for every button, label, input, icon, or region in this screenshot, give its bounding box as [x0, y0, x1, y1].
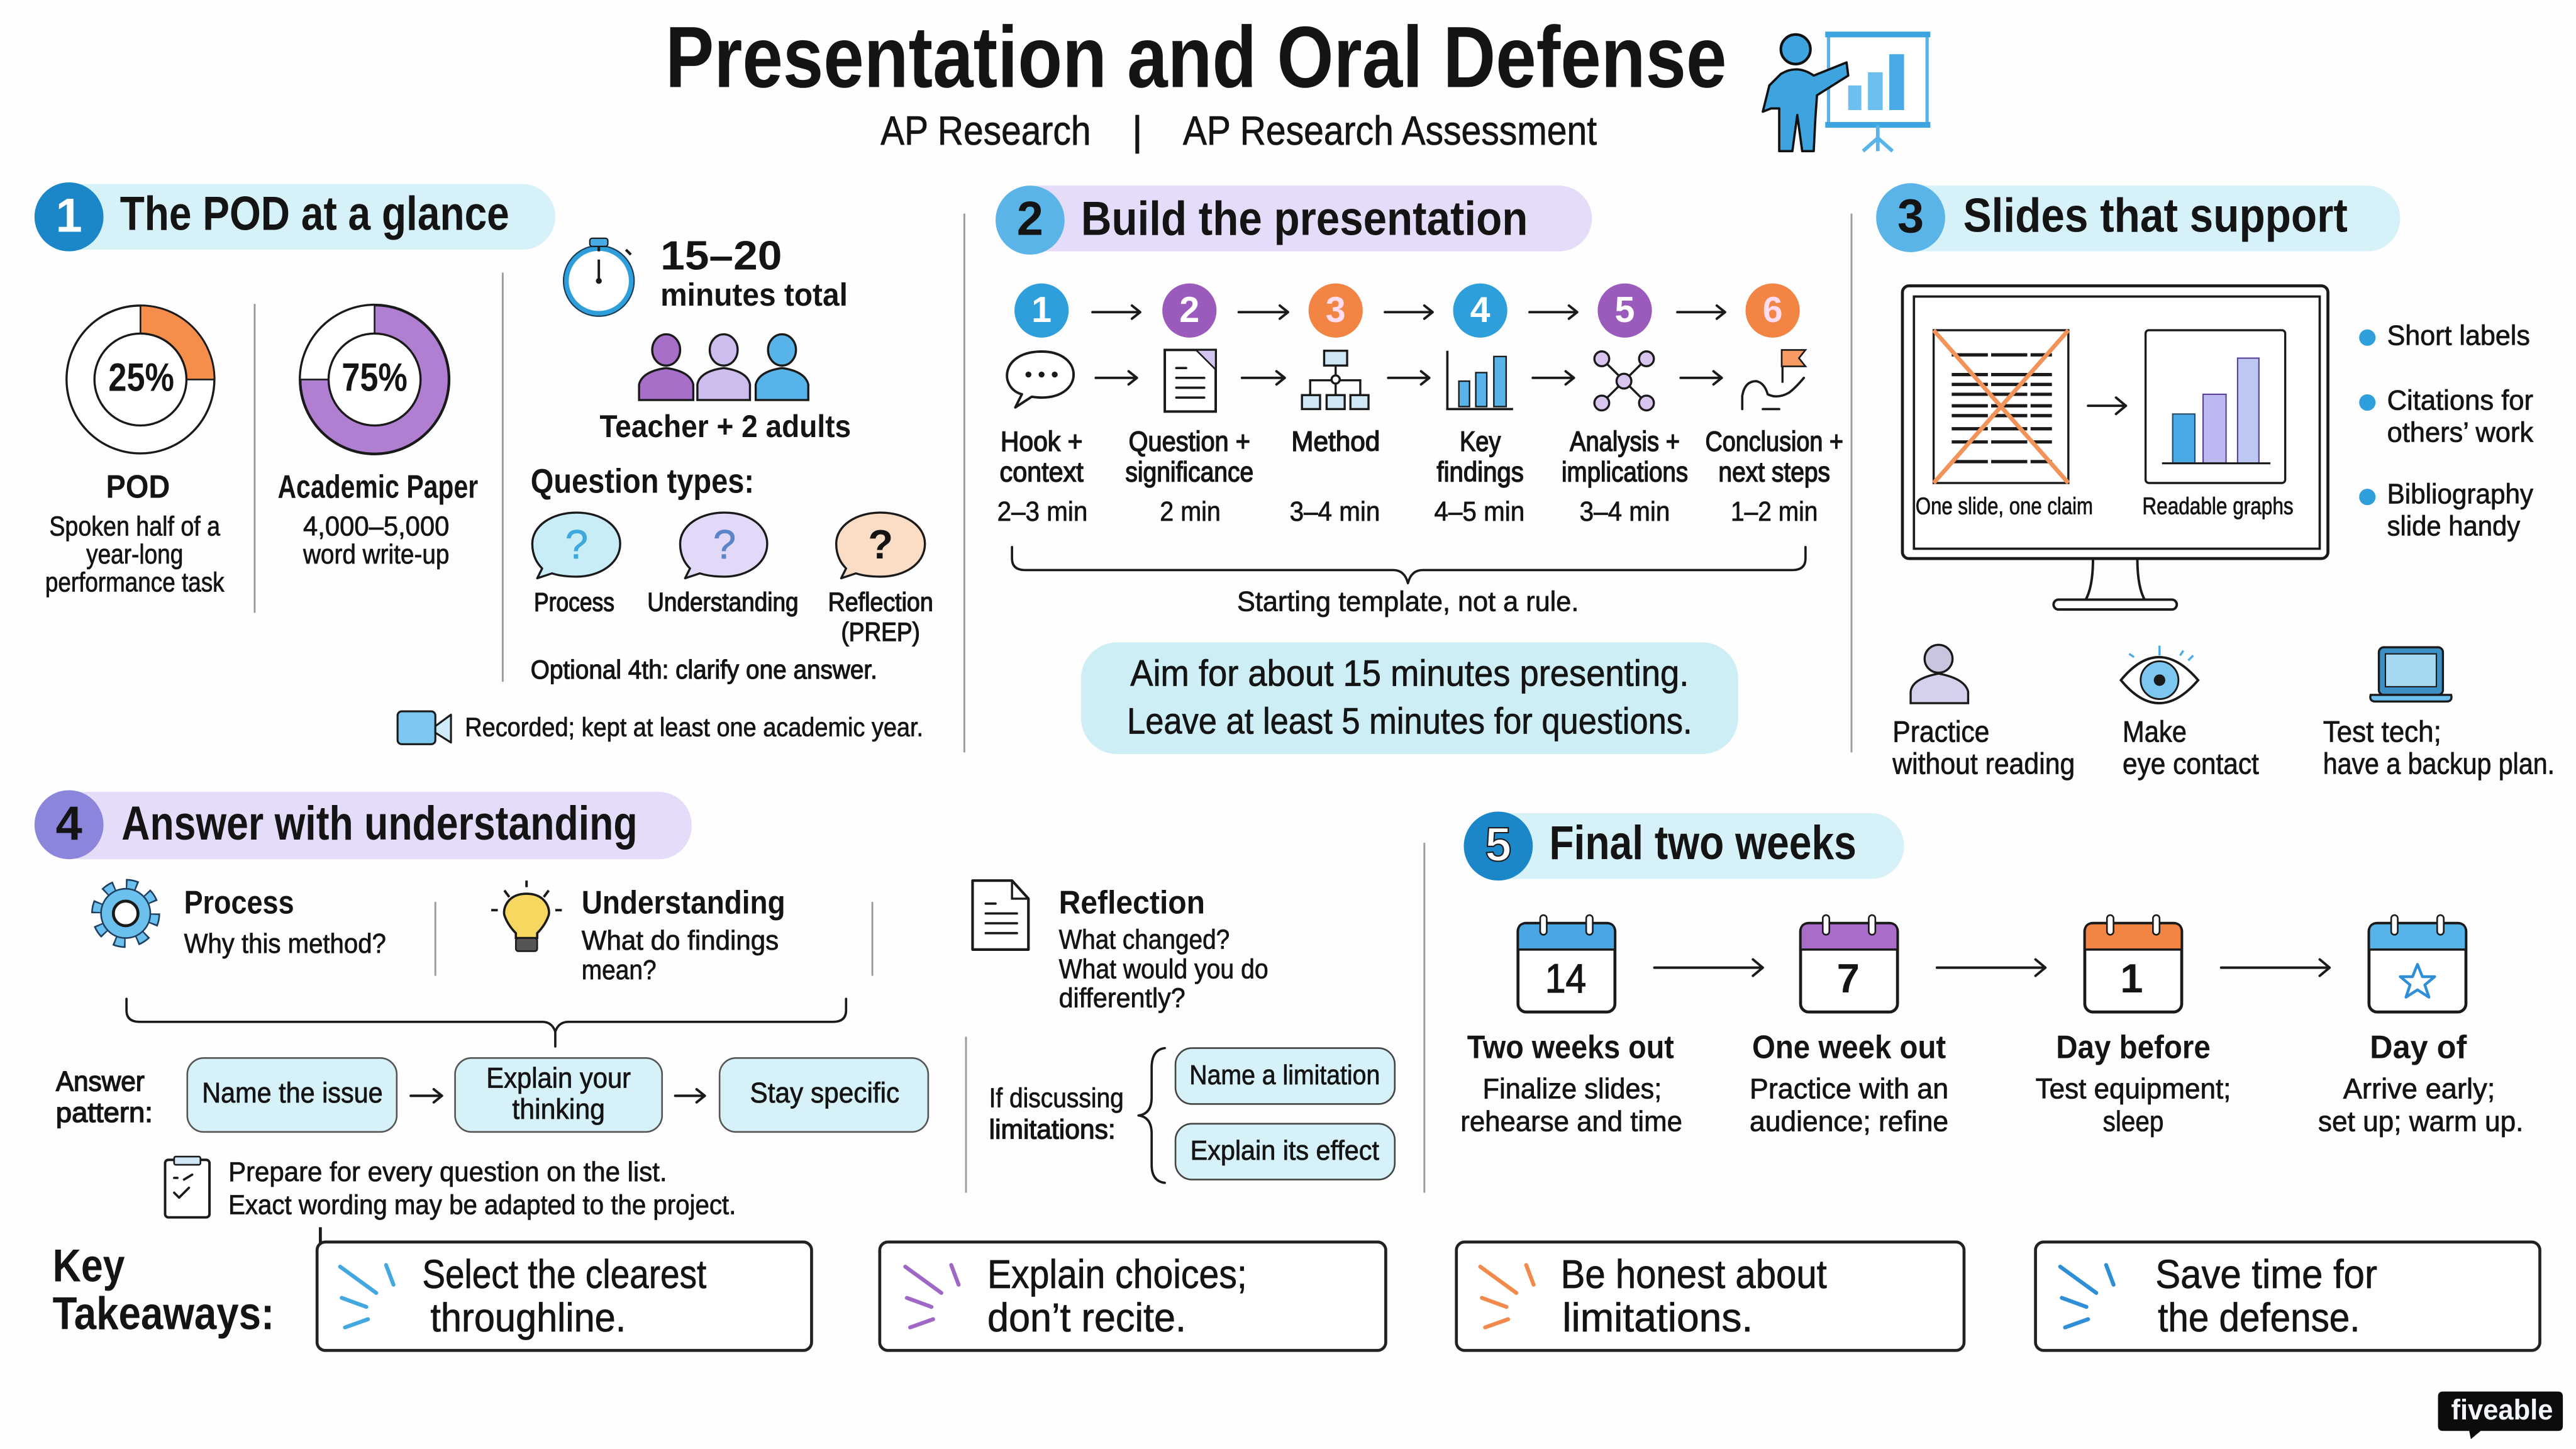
- takeaway: throughline: [317, 1242, 811, 1350]
- panel: key takeaways: [53, 1227, 2540, 1350]
- icon: network: [1594, 352, 1654, 411]
- panel: 5 Final two weeks: [1460, 811, 2523, 1138]
- arrow: [2221, 960, 2329, 976]
- icon: calendar 7: [1801, 915, 1897, 1012]
- icon: presenter at chart board: [1763, 35, 1930, 151]
- text: step names and times: Analysis +: [1570, 426, 1680, 457]
- icon: Understanding question bubble: ?: [713, 521, 736, 567]
- bullet list: [2359, 321, 2534, 542]
- step: Explain your thinking: [455, 1058, 662, 1132]
- bullet list: Short labels: [2387, 321, 2530, 352]
- text: Academic Paper description: Academic Paper: [277, 469, 478, 506]
- text: prepare note: [228, 1157, 736, 1220]
- numbered step circles: [1014, 284, 1800, 338]
- text: POD description: POD: [106, 469, 170, 506]
- panel: 3 Slides that support: [1876, 183, 2555, 780]
- icon: light bulb: [491, 880, 562, 951]
- text: recorded: Recorded; kept at least one academic year.: [465, 712, 923, 741]
- takeaway: limitations: Be honest about: [1561, 1252, 1827, 1297]
- heading: section 1: [35, 182, 555, 252]
- text: Understanding: [582, 884, 786, 985]
- arrow: [1937, 960, 2045, 976]
- text: delivery tips: [1892, 714, 2555, 780]
- heading: key takeaways: Key: [53, 1241, 125, 1292]
- heading: section 5: Final two weeks: [1549, 816, 1857, 870]
- text: answer pattern: Answer: [56, 1067, 145, 1097]
- heading: section 5: [1464, 811, 1904, 880]
- text: step names and times: [997, 426, 1843, 527]
- icon: stopwatch: [564, 238, 634, 316]
- logo: fiveable: fiveable: [2451, 1394, 2553, 1426]
- callout: timing: [1081, 642, 1738, 754]
- takeaway: throughline: Select the clearest: [422, 1252, 706, 1297]
- heading: section 4: 4: [56, 797, 82, 850]
- text: day of: Arrive early;: [2343, 1072, 2495, 1104]
- text: day of: Day of: [2370, 1029, 2467, 1065]
- text: Question types: Question types:: [531, 462, 754, 501]
- arrow: [1655, 960, 1763, 976]
- icon: calendar star: [2369, 915, 2466, 1012]
- takeaway: explain choices: [880, 1242, 1385, 1350]
- text: Reflection: What changed?: [1059, 925, 1230, 955]
- text: delivery tips: Make: [2123, 714, 2187, 748]
- text: step names and times: 3–4 min: [1290, 497, 1380, 527]
- takeaway: save time: [2036, 1242, 2540, 1350]
- icon: Reflection question bubble: ?: [868, 521, 893, 567]
- text: Understanding: What do findings: [582, 926, 779, 956]
- heading: key takeaways: Takeaways:: [53, 1288, 274, 1339]
- text: day before: sleep: [2103, 1106, 2163, 1138]
- text: Reflection: What would you do: [1059, 955, 1269, 985]
- slide captions: Readable graphs: [2142, 494, 2294, 520]
- text: step names and times: Method: [1291, 426, 1380, 457]
- icon: clipboard: [165, 1157, 209, 1218]
- bullet list: Bibliography: [2387, 479, 2534, 510]
- callout: timing: Leave at least 5 minutes for questions.: [1127, 701, 1692, 741]
- text: delivery tips: Test tech;: [2323, 714, 2441, 748]
- arrow: [675, 1089, 705, 1102]
- text: one week out: One week out: [1752, 1029, 1946, 1065]
- slide captions: One slide, one claim: [1916, 494, 2093, 520]
- step: Stay specific: [719, 1058, 928, 1132]
- box: name a limitation: [1175, 1048, 1395, 1104]
- icon: Understanding question bubble: [680, 513, 767, 579]
- text: day of: [2318, 1029, 2523, 1138]
- heading: section 5: 5: [1485, 818, 1511, 872]
- icon: person practicing: [1911, 645, 1968, 703]
- text: step names and times: 3–4 min: [1580, 497, 1670, 527]
- chart: POD 25% donut: 25%: [108, 356, 174, 400]
- text: step names and times: Key: [1460, 426, 1501, 457]
- numbered step circles: 1: [1031, 290, 1052, 330]
- text: question type labels: [534, 587, 933, 647]
- text: if discussing limitations: If discussing: [989, 1084, 1124, 1114]
- text: Understanding: mean?: [582, 955, 657, 985]
- text: prepare note: Exact wording may be adapted to the project.: [228, 1190, 736, 1220]
- brace: [1012, 547, 1806, 583]
- callout: timing: Aim for about 15 minutes presenting.: [1130, 653, 1689, 694]
- text: delivery tips: Practice: [1892, 714, 1989, 748]
- text: step names and times: 1–2 min: [1731, 497, 1818, 527]
- step: Name the issue: Name the issue: [202, 1077, 383, 1109]
- text: delivery tips: without reading: [1892, 747, 2075, 780]
- heading: section 3: Slides that support: [1963, 189, 2348, 242]
- text: question type labels: Reflection: [828, 587, 933, 617]
- takeaway: explain choices: don’t recite.: [987, 1295, 1186, 1340]
- text: answer pattern: [56, 1067, 153, 1128]
- icon: monitor: [1902, 286, 2328, 609]
- text: Process: Process: [184, 884, 294, 921]
- text: step names and times: Question +: [1129, 426, 1250, 457]
- step: Explain your thinking: Explain your: [486, 1062, 631, 1094]
- text: one week out: audience; refine: [1750, 1106, 1948, 1138]
- text: step names and times: 4–5 min: [1434, 497, 1524, 527]
- heading: section 2: 2: [1017, 192, 1043, 246]
- numbered step circles: 6: [1763, 290, 1783, 330]
- bullet list: slide handy: [2387, 511, 2521, 542]
- text: step names and times: context: [1000, 457, 1084, 487]
- text: one week out: [1750, 1029, 1948, 1138]
- chart: Academic Paper 75% donut: 75%: [341, 356, 408, 400]
- heading: section 4: Answer with understanding: [121, 797, 638, 850]
- text: Academic Paper description: [277, 469, 478, 570]
- box: explain its effect: Explain its effect: [1191, 1136, 1379, 1166]
- heading: section 1: The POD at a glance: [120, 187, 509, 241]
- numbered step circles: 2: [1179, 290, 1199, 330]
- text: question type labels: Understanding: [647, 587, 799, 617]
- icon: eye: [2121, 646, 2198, 703]
- text: Process: [184, 884, 386, 959]
- takeaway: limitations: [1457, 1242, 1964, 1350]
- crossed out text slide: [1934, 330, 2068, 483]
- bullet list: others’ work: [2387, 418, 2534, 448]
- text: Reflection: Reflection: [1059, 884, 1205, 921]
- text: step names and times: findings: [1436, 457, 1524, 487]
- text: two weeks out: [1460, 1029, 1682, 1138]
- panel: 4 Answer with understanding: [35, 790, 1424, 1220]
- text: day of: set up; warm up.: [2318, 1106, 2523, 1138]
- text: one week out: Practice with an: [1750, 1072, 1948, 1104]
- text: Process: Why this method?: [184, 929, 386, 959]
- arrow: [411, 1089, 442, 1102]
- text: step names and times: Hook +: [1001, 426, 1082, 457]
- panel: 2 Build the presentation: [996, 186, 1843, 754]
- title: Presentation and Oral Defense: [665, 9, 1726, 106]
- text: delivery tips: eye contact: [2123, 747, 2259, 780]
- takeaway: save time: Save time for: [2155, 1252, 2377, 1297]
- box: explain its effect: [1175, 1124, 1395, 1180]
- text: 15–20 minutes total: 15–20: [660, 232, 782, 278]
- icon: calendar 1: [2085, 915, 2182, 1012]
- chart: POD 25% donut: [67, 306, 214, 453]
- logo: fiveable: [2438, 1392, 2563, 1439]
- icon: document with fold: [1165, 350, 1216, 411]
- icon: calendar 14: 14: [1545, 955, 1586, 1001]
- heading: section 2: [996, 186, 1592, 255]
- text: POD description: year-long: [86, 540, 183, 570]
- step: Name the issue: [187, 1058, 397, 1132]
- takeaway: throughline: throughline.: [430, 1295, 626, 1340]
- takeaway: limitations: limitations.: [1562, 1295, 1753, 1340]
- text: POD description: performance task: [45, 567, 225, 597]
- icon: gear: [97, 886, 153, 941]
- arrows between step numbers and icons: [1092, 306, 1725, 384]
- text: step names and times: Conclusion +: [1706, 426, 1843, 457]
- subtitle: |: [1132, 108, 1143, 153]
- text: question type labels: Process: [534, 587, 614, 617]
- text: if discussing limitations: [989, 1084, 1124, 1145]
- icon: document: [972, 880, 1028, 950]
- heading: section 4: [35, 790, 692, 859]
- subtitle: [880, 108, 1597, 153]
- icon: Process question bubble: ?: [565, 521, 588, 567]
- icon: video camera: [397, 711, 451, 744]
- icon: method hierarchy: [1302, 351, 1368, 409]
- heading: section 2: Build the presentation: [1081, 192, 1528, 246]
- text: POD description: [45, 469, 225, 597]
- takeaway: explain choices: Explain choices;: [987, 1252, 1247, 1297]
- text: two weeks out: Two weeks out: [1467, 1029, 1674, 1065]
- numbered step circles: 5: [1615, 290, 1635, 330]
- text: Academic Paper description: word write-up: [303, 540, 449, 570]
- step: Stay specific: Stay specific: [750, 1077, 899, 1109]
- text: prepare note: Prepare for every question on the list.: [228, 1157, 667, 1187]
- icon: calendar 7: 7: [1837, 955, 1860, 1001]
- numbered step circles: 4: [1470, 290, 1491, 330]
- box: name a limitation: Name a limitation: [1189, 1060, 1380, 1091]
- icon: speech bubble: [1007, 352, 1074, 408]
- text: optional 4th: Optional 4th: clarify one answer.: [531, 655, 877, 684]
- readable chart slide: [2146, 330, 2285, 483]
- step: Explain your thinking: thinking: [512, 1093, 605, 1125]
- arrow to chart: [2088, 397, 2126, 414]
- slide captions: [1916, 494, 2294, 520]
- panel: 1 The POD at a glance: [35, 182, 1852, 752]
- text: step names and times: next steps: [1718, 457, 1830, 487]
- bullet list: Citations for: [2387, 386, 2533, 416]
- heading: section 3: 3: [1897, 190, 1924, 243]
- text: step names and times: significance: [1125, 457, 1253, 487]
- text: step names and times: 2–3 min: [997, 497, 1087, 527]
- text: day before: Day before: [2056, 1029, 2211, 1065]
- text: Understanding: Understanding: [582, 884, 786, 921]
- icon: calendar 14: [1518, 915, 1615, 1012]
- text: 15–20 minutes total: [660, 232, 848, 313]
- text: day before: Test equipment;: [2036, 1072, 2231, 1104]
- text: Reflection: [1059, 884, 1269, 1013]
- subtitle: AP Research: [880, 108, 1091, 153]
- text: 15–20 minutes total: minutes total: [660, 277, 848, 313]
- numbered step circles: 3: [1326, 290, 1346, 330]
- text: Teacher + 2 adults: Teacher + 2 adults: [599, 409, 851, 444]
- icon: Process question bubble: [532, 513, 620, 579]
- text: question type labels: (PREP): [841, 617, 920, 647]
- icon: three people: [639, 335, 808, 400]
- chart: Academic Paper 75% donut: [300, 305, 449, 454]
- icon: laptop: [2370, 647, 2451, 701]
- curly brace: [1138, 1048, 1165, 1183]
- icon: Reflection question bubble: [836, 513, 925, 579]
- text: POD description: Spoken half of a: [49, 512, 220, 542]
- text: answer pattern: pattern:: [56, 1097, 153, 1128]
- takeaway: save time: the defense.: [2158, 1295, 2360, 1340]
- text: step names and times: 2 min: [1160, 497, 1221, 527]
- text: two weeks out: Finalize slides;: [1483, 1072, 1662, 1104]
- icon: bar chart: [1447, 351, 1513, 409]
- subtitle: AP Research Assessment: [1183, 108, 1597, 153]
- text: if discussing limitations: limitations:: [989, 1114, 1116, 1145]
- icon: path with flag: [1742, 350, 1806, 409]
- text: step names and times: implications: [1562, 457, 1688, 487]
- text: two weeks out: rehearse and time: [1460, 1106, 1682, 1138]
- text: starting template: Starting template, not a rule.: [1237, 587, 1579, 618]
- brace: [126, 999, 846, 1046]
- text: Academic Paper description: 4,000–5,000: [303, 512, 449, 542]
- heading: key takeaways: [53, 1241, 274, 1339]
- text: Reflection: differently?: [1059, 983, 1185, 1013]
- text: day before: [2036, 1029, 2231, 1138]
- heading: section 3: [1876, 183, 2400, 252]
- heading: section 1: 1: [56, 189, 82, 242]
- icon: calendar 1: 1: [2120, 955, 2143, 1001]
